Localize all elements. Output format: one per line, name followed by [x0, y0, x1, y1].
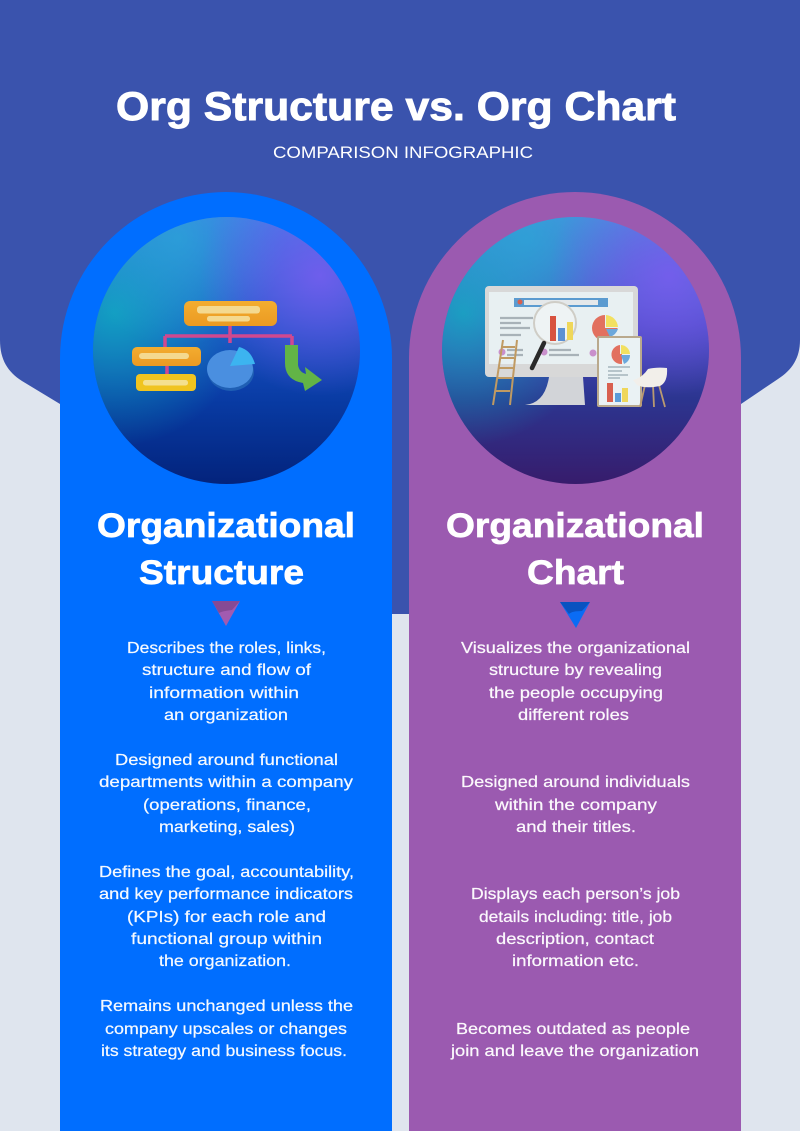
text block: description: an organization: [164, 707, 288, 724]
text block: details: information etc.: [512, 953, 639, 970]
text block: design: departments within a company: [99, 774, 353, 791]
text block: outdated: join and leave the organization: [450, 1043, 699, 1060]
text block: goals: (KPIs) for each role and: [127, 909, 326, 926]
text block: design: Designed around individuals: [461, 774, 690, 791]
text block: goals: Defines the goal, accountability,: [99, 864, 354, 881]
text block: goals: the organization.: [159, 953, 291, 970]
text block: details: [471, 886, 680, 970]
text block: description: Visualizes the organizational: [461, 640, 690, 657]
text block: description: structure by revealing: [489, 662, 662, 679]
text block: design: [99, 752, 353, 836]
text block: design: marketing, sales): [159, 819, 295, 836]
text block: stability: its strategy and business focus.: [101, 1043, 347, 1060]
text block: description: [127, 640, 326, 724]
text block: description: different roles: [518, 707, 629, 724]
text block: goals: functional group within: [131, 931, 322, 948]
heading: organizational chart: Chart: [527, 554, 624, 592]
icon: org chart circle: [442, 217, 709, 484]
heading: organizational structure: [97, 507, 355, 592]
heading: organizational chart: Organizational: [446, 507, 704, 545]
panel: organizational chart: [409, 192, 741, 1131]
heading: organizational structure: Organizational: [97, 507, 355, 545]
text block: design: and their titles.: [516, 819, 636, 836]
text block: outdated: Becomes outdated as people: [456, 1021, 690, 1038]
header background shape: [0, 0, 800, 614]
icon: purple triangle: [212, 601, 240, 626]
text block: details: Displays each person’s job: [471, 886, 680, 903]
panel: organizational structure: [60, 192, 392, 1131]
text block: description: the people occupying: [489, 685, 663, 702]
text block: details: details including: title, job: [479, 909, 672, 926]
subtitle: COMPARISON INFOGRAPHIC: [273, 143, 533, 162]
text block: description: structure and flow of: [142, 662, 312, 679]
text block: design: within the company: [494, 797, 657, 814]
text block: goals: [99, 864, 354, 970]
text block: description: information within: [149, 685, 299, 702]
heading: organizational chart: [446, 507, 704, 592]
icon: blue triangle: [560, 602, 590, 628]
text block: outdated: [450, 1021, 699, 1060]
text block: design: Designed around functional: [115, 752, 338, 769]
text block: design: [461, 774, 690, 836]
icon: org structure circle: [93, 217, 360, 484]
heading: organizational structure: Structure: [139, 554, 304, 592]
text block: stability: [100, 998, 353, 1060]
text block: stability: Remains unchanged unless the: [100, 998, 353, 1015]
text block: stability: company upscales or changes: [105, 1021, 347, 1038]
text block: goals: and key performance indicators: [99, 886, 353, 903]
text block: description: Describes the roles, links,: [127, 640, 326, 657]
text block: description: [461, 640, 690, 724]
title: Org Structure vs. Org Chart: [116, 85, 676, 129]
text block: design: (operations, finance,: [143, 797, 311, 814]
text block: details: description, contact: [496, 931, 655, 948]
